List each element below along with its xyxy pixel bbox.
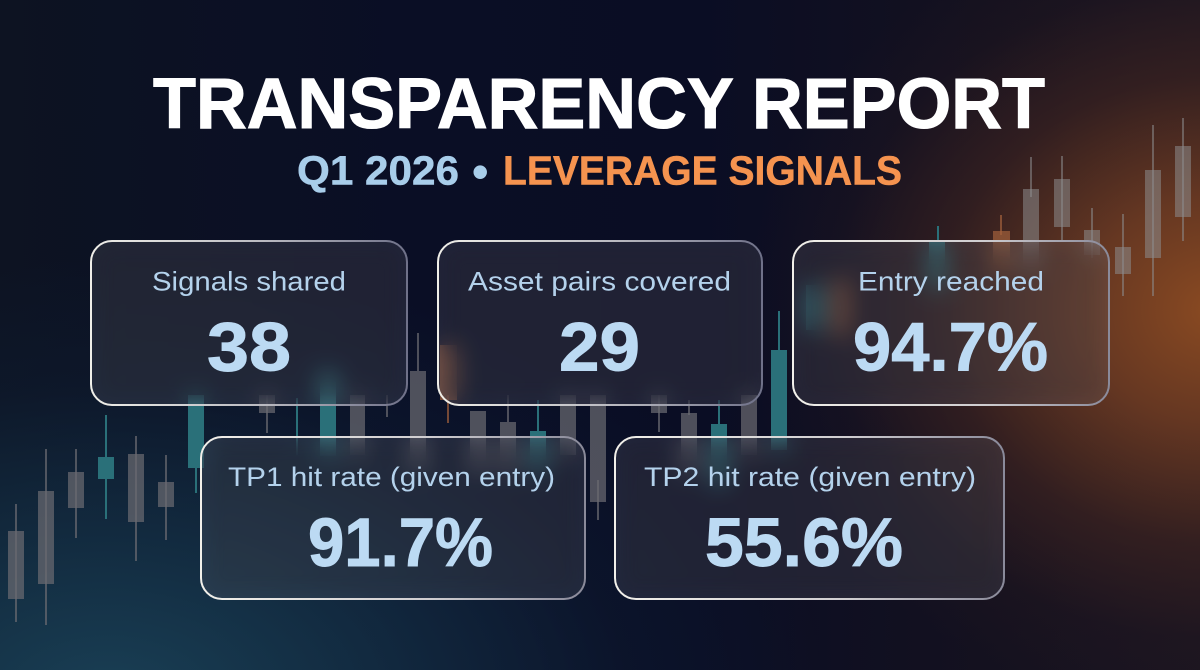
card: entry reached: Entry reached [858,266,1044,296]
card: TP1 hit rate [200,436,586,600]
subtitle [297,145,902,198]
card: TP2 hit rate [614,436,1005,600]
subtitle: • [472,145,488,198]
card: entry reached [792,240,1110,406]
card: signals shared: 38 [207,308,291,386]
card: signals shared [90,240,408,406]
subtitle: LEVERAGE SIGNALS [503,148,902,194]
card: TP1 hit rate: 91.7% [308,504,493,581]
card: asset pairs covered: Asset pairs covered [468,266,731,296]
card: asset pairs covered [437,240,763,406]
subtitle: Q1 2026 [297,148,459,194]
card: TP2 hit rate: TP2 hit rate (given entry) [644,462,976,492]
title: TRANSPARENCY REPORT [153,65,1045,144]
card: TP2 hit rate: 55.6% [705,504,903,581]
card: TP1 hit rate: TP1 hit rate (given entry) [228,462,555,492]
card: asset pairs covered: 29 [559,308,640,386]
card: signals shared: Signals shared [152,266,346,296]
card: entry reached: 94.7% [853,308,1048,386]
